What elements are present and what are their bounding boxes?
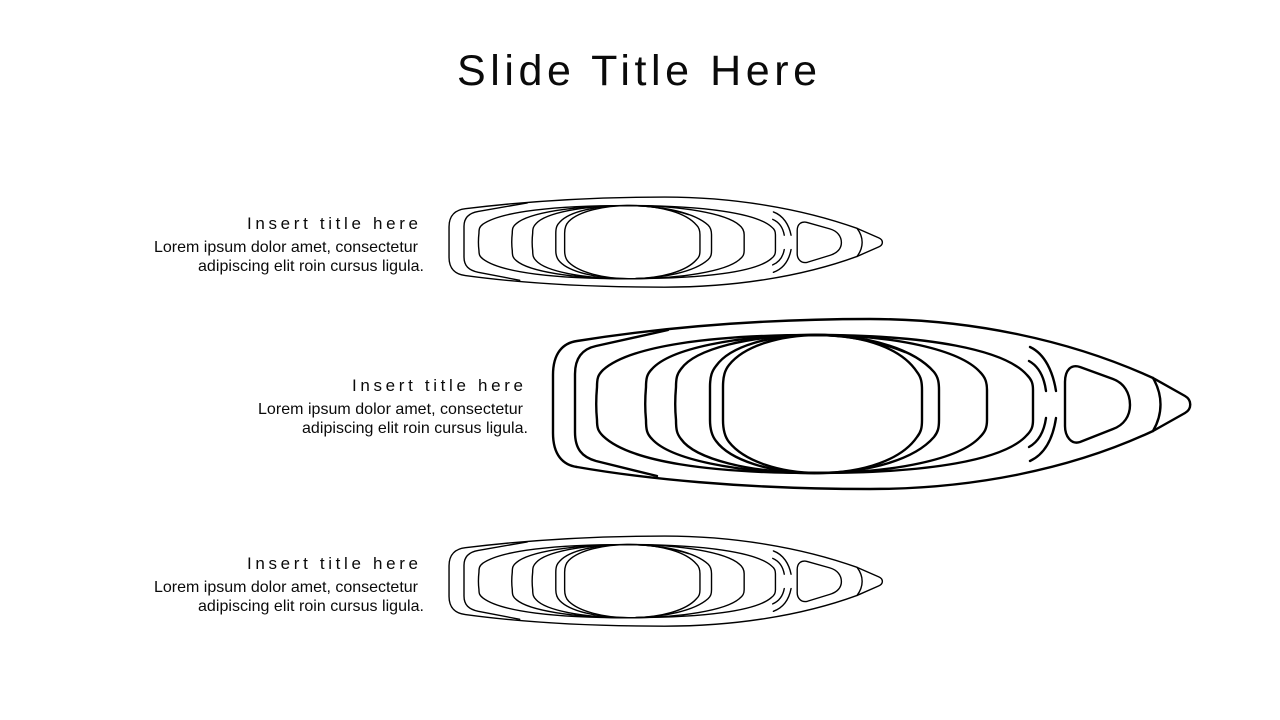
icon: large boat outline [553, 319, 1190, 489]
icon: top boat outline [449, 197, 882, 287]
top item body text [154, 239, 424, 275]
bottom item heading: Insert title here [247, 554, 418, 573]
top item body text: adipiscing elit roin cursus ligula. [198, 258, 424, 275]
middle item heading: Insert title here [352, 376, 523, 395]
top item heading: Insert title here [247, 214, 418, 233]
panel: top boat item [154, 197, 882, 287]
bottom item body text: Lorem ipsum dolor amet, consectetur [154, 579, 419, 596]
middle item body text [258, 401, 528, 437]
panel: bottom boat item [154, 536, 882, 626]
middle item body text: Lorem ipsum dolor amet, consectetur [258, 401, 524, 418]
middle item body text: adipiscing elit roin cursus ligula. [302, 420, 528, 437]
panel: middle boat item [258, 319, 1190, 489]
bottom item body text [154, 579, 424, 615]
top item body text: Lorem ipsum dolor amet, consectetur [154, 239, 419, 256]
icon: bottom boat outline [449, 536, 882, 626]
bottom item body text: adipiscing elit roin cursus ligula. [198, 598, 424, 615]
title: Slide Title Here [457, 47, 817, 95]
